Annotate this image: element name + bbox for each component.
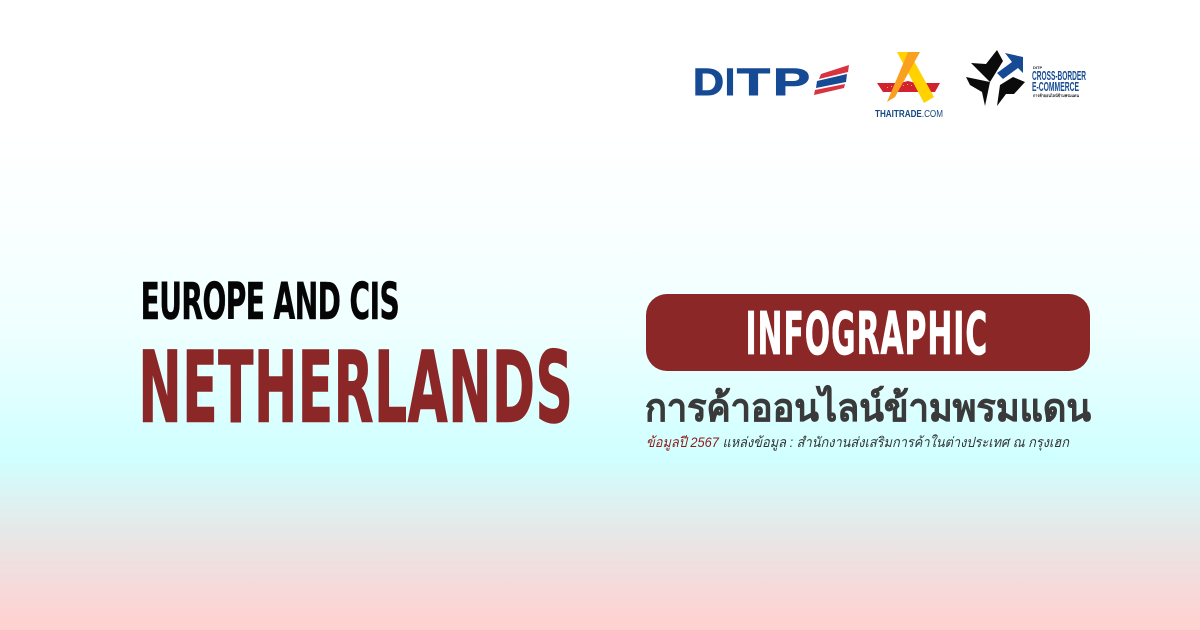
DITP wordmark: P — [773, 62, 810, 104]
icon: black star pieces — [966, 50, 1025, 106]
Thai title: การค้าออนไลน์ข้ามพรมแดน — [645, 385, 1091, 430]
icon: yellow stroke — [897, 52, 934, 103]
logo: ThaiTrade — [875, 52, 943, 120]
cross-border wordmark — [1032, 68, 1086, 94]
cross-border wordmark: CROSS-BORDER — [1032, 68, 1086, 83]
badge label: INFOGRAPHIC — [746, 300, 987, 368]
country heading: NETHERLANDS — [138, 331, 573, 445]
icon: orange stroke — [887, 52, 920, 102]
thaitrade wordmark: THAITRADE.COM — [875, 109, 943, 120]
small caption: การค้าออนไลน์ข้ามพรมแดน — [1033, 92, 1079, 98]
logo: DITP — [693, 62, 849, 104]
source line: ข้อมูลปี 2567 แหล่งข้อมูล : สำนักงานส่งเสริมการค้าในต่างประเทศ ณ กรุงเฮก — [646, 434, 1070, 451]
DITP wordmark: T — [737, 62, 770, 104]
icon: gold dots — [887, 84, 912, 88]
icon: red base — [877, 81, 940, 92]
icon: Thai flag stripes — [814, 65, 849, 95]
badge background — [646, 294, 1090, 371]
region heading: EUROPE AND CIS — [141, 272, 400, 331]
cross-border wordmark: E-COMMERCE — [1032, 79, 1079, 94]
logo: Cross-border e-commerce — [966, 50, 1086, 106]
tiny label: DITP — [1033, 65, 1042, 70]
DITP wordmark: I — [725, 62, 735, 104]
icon: blue arrow — [997, 53, 1023, 79]
DITP wordmark — [693, 62, 810, 104]
DITP wordmark: D — [693, 62, 724, 104]
infographic badge — [646, 294, 1090, 371]
